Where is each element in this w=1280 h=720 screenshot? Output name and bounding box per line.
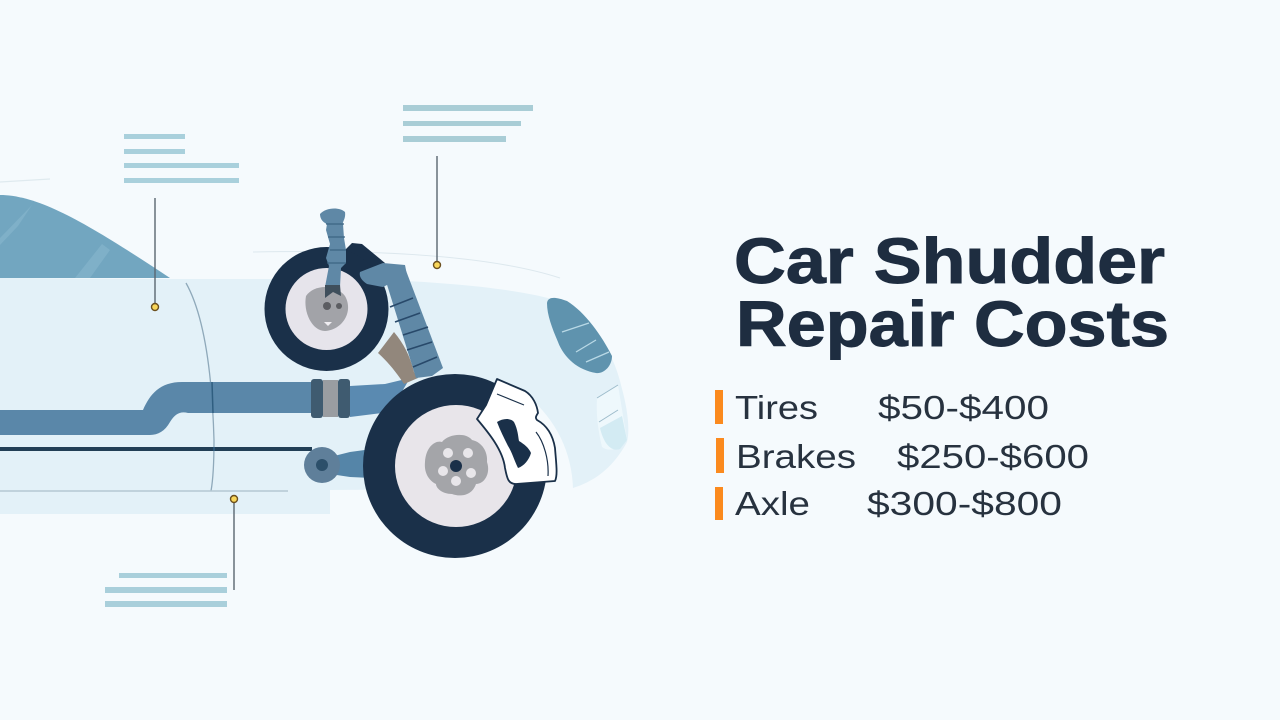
upper small wheel — [264, 247, 388, 371]
hood highlight line — [253, 251, 560, 278]
row: tires — [715, 389, 1049, 426]
front bumper detail — [597, 385, 627, 450]
callout dot: sill — [230, 496, 238, 590]
roof line — [0, 179, 50, 182]
callout dot: hood — [434, 156, 440, 268]
title: Repair Costs — [736, 288, 1169, 360]
cost list — [715, 389, 1089, 522]
title: Car Shudder — [734, 225, 1165, 297]
lower control arm — [304, 447, 372, 483]
title — [734, 225, 1169, 360]
row: axle — [715, 485, 1062, 522]
wheel arch cut-out — [480, 396, 573, 492]
brake caliper — [477, 379, 557, 484]
thin tie rod — [0, 447, 312, 451]
callout dot: windshield — [152, 198, 158, 310]
row: tires: Tires — [735, 389, 818, 426]
main front wheel — [363, 374, 547, 558]
row: axle: $300-$800 — [867, 485, 1062, 522]
callout placeholder lines: left — [124, 134, 239, 183]
row: axle: Axle — [735, 485, 810, 522]
sill line — [0, 490, 288, 492]
axle tube — [0, 382, 311, 435]
axle to wheel link — [350, 378, 410, 417]
windshield — [0, 195, 170, 278]
headlight — [547, 298, 612, 373]
door seam — [186, 283, 214, 491]
dark upper mount — [345, 243, 385, 292]
axle boot — [311, 379, 350, 418]
callout placeholder lines: bottom — [105, 573, 227, 607]
row: brakes: $250-$600 — [897, 438, 1089, 475]
car illustration — [0, 156, 628, 590]
large coil strut — [360, 263, 443, 378]
callout placeholder lines: top — [403, 105, 533, 142]
upper vertical strut — [320, 208, 346, 298]
hub — [425, 435, 488, 495]
car body — [0, 278, 628, 514]
row: brakes — [716, 438, 1089, 475]
row: brakes: Brakes — [736, 438, 856, 475]
row: tires: $50-$400 — [878, 389, 1049, 426]
brown strut link — [378, 332, 418, 384]
door seam over axle — [212, 382, 214, 451]
